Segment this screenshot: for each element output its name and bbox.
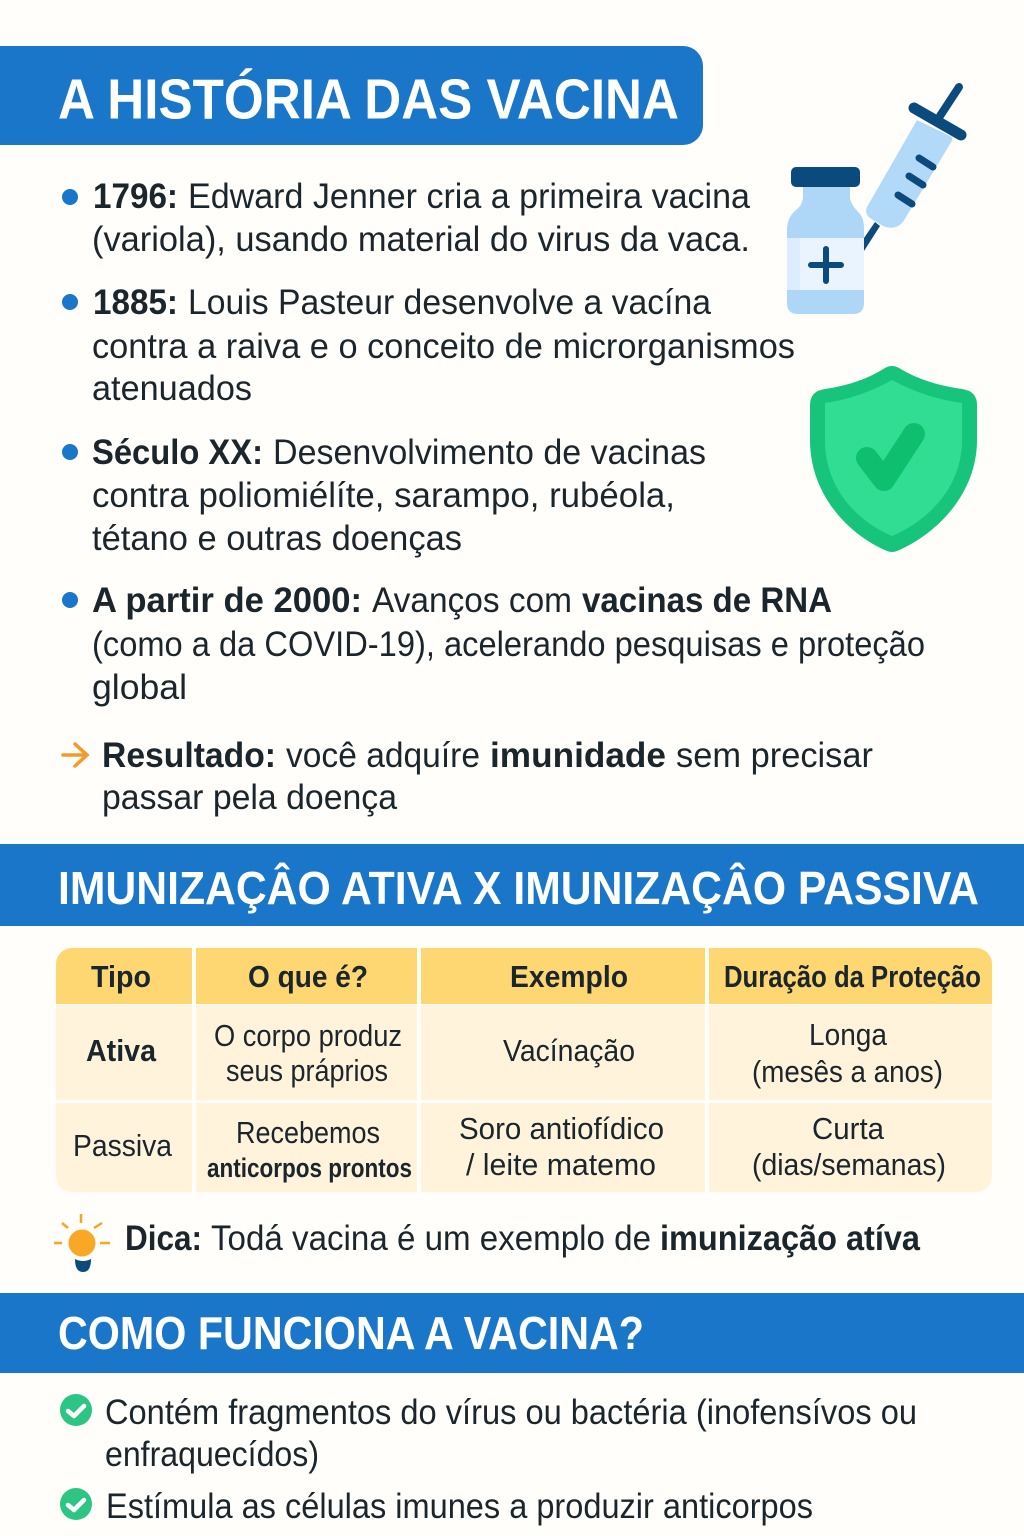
result: arrow and text: imunidade [490,736,666,775]
title banner: A HISTÓRIA DAS VACINA [58,68,679,132]
table cell backgrounds [56,948,992,1192]
bullet: A partir de 2000: global [92,668,187,707]
result: arrow and text: passar pela doença [102,778,398,817]
bullet: 1796: Edward Jenner cria a primeira vacina [188,177,751,216]
bullet: Século XX: Desenvolvimento de vacinas [273,433,706,472]
bullet: 1796: 1796: [93,177,178,216]
result: arrow and text: sem precisar [676,736,873,775]
tip: lightbulb and text: Dica: [125,1219,202,1258]
bullet: Século XX: Século XX: [92,433,263,472]
bullet: 1885: Louis Pasteur desenvolve a vacína [188,283,712,322]
table row: passiva: Curta [812,1111,885,1146]
table header row: Tipo [91,959,151,994]
tip: lightbulb and text: imunização atíva [660,1219,920,1258]
bullet: A partir de 2000: Avanços com [372,581,572,620]
table header row: Exemplo [510,959,628,994]
table row: passiva [73,1111,946,1183]
table row: ativa: (mesês a anos) [752,1054,943,1089]
check item 1: Contém fragmentos do vírus ou bactéria (inofensívos ou [105,1393,917,1432]
bullet: Século XX: contra poliomiélíte, sarampo, rubéola, [92,476,675,515]
check item 2: Estímula as células imunes a produzir anticorpos [106,1487,813,1526]
result: arrow and text [63,736,873,817]
bullet: 1885: atenuados [92,369,252,408]
table row: passiva: Soro antiofídico [459,1111,664,1146]
table row: passiva: Passiva [73,1128,173,1163]
icon: green shield with check [810,366,977,552]
bullet: Século XX [62,433,706,558]
table row: passiva: (dias/semanas) [752,1147,946,1182]
bullet: 1885: contra a raiva e o conceito de microrganismos [92,327,795,366]
bullet: 1885 [62,283,795,408]
result: arrow and text: você adquíre [286,736,480,775]
check item 1 [60,1393,917,1474]
table header row [91,959,981,994]
bullet: A partir de 2000: (como a da COVID-19), acelerando pesquisas e proteção [92,625,925,664]
table row: passiva: Recebemos [236,1115,380,1150]
table row: passiva: / leite matemo [466,1147,656,1182]
icon: lightbulb [54,1214,110,1272]
bullet: Século XX: tétano e outras doenças [92,519,462,558]
table row: ativa: seus práprios [226,1053,388,1088]
result: arrow and text: Resultado: [102,736,276,775]
table header row: O que é? [248,959,368,994]
bullet: A partir de 2000: vacinas de RNA [582,581,832,620]
icon: vaccine vial and syringe [787,87,961,314]
check item 1: enfraquecídos) [105,1435,319,1474]
bullet: A partir de 2000 [62,581,925,707]
table row: ativa: Longa [809,1017,888,1052]
section heading: como funciona a vacina: COMO FUNCIONA A VACINA? [58,1307,644,1359]
text block: history timeline [62,177,925,817]
bullet: 1796 [62,177,751,259]
table row: ativa: Ativa [86,1033,157,1068]
table row: ativa: O corpo produz [214,1018,402,1053]
checklist: how vaccines work [60,1393,917,1526]
section heading: como funciona a vacina [0,1293,1024,1373]
bullet: 1796: (variola), usando material do virus da vaca. [92,220,750,259]
table row: ativa: Vacínação [503,1033,635,1068]
section heading: imunização ativa x passiva [0,844,1024,926]
table row: ativa [86,1017,943,1089]
tip: lightbulb and text [54,1214,920,1272]
bullet: 1885: 1885: [93,283,178,322]
tip: lightbulb and text: Todá vacina é um exemplo de [211,1219,651,1258]
title banner [0,46,703,145]
bullet: A partir de 2000: A partir de 2000: [92,581,362,620]
table row: passiva: anticorpos prontos [207,1153,412,1183]
comparison table [56,948,992,1192]
section heading: imunização ativa x passiva: IMUNIZAÇÂO ATIVA X IMUNIZAÇÂO PASSIVA [58,862,979,914]
